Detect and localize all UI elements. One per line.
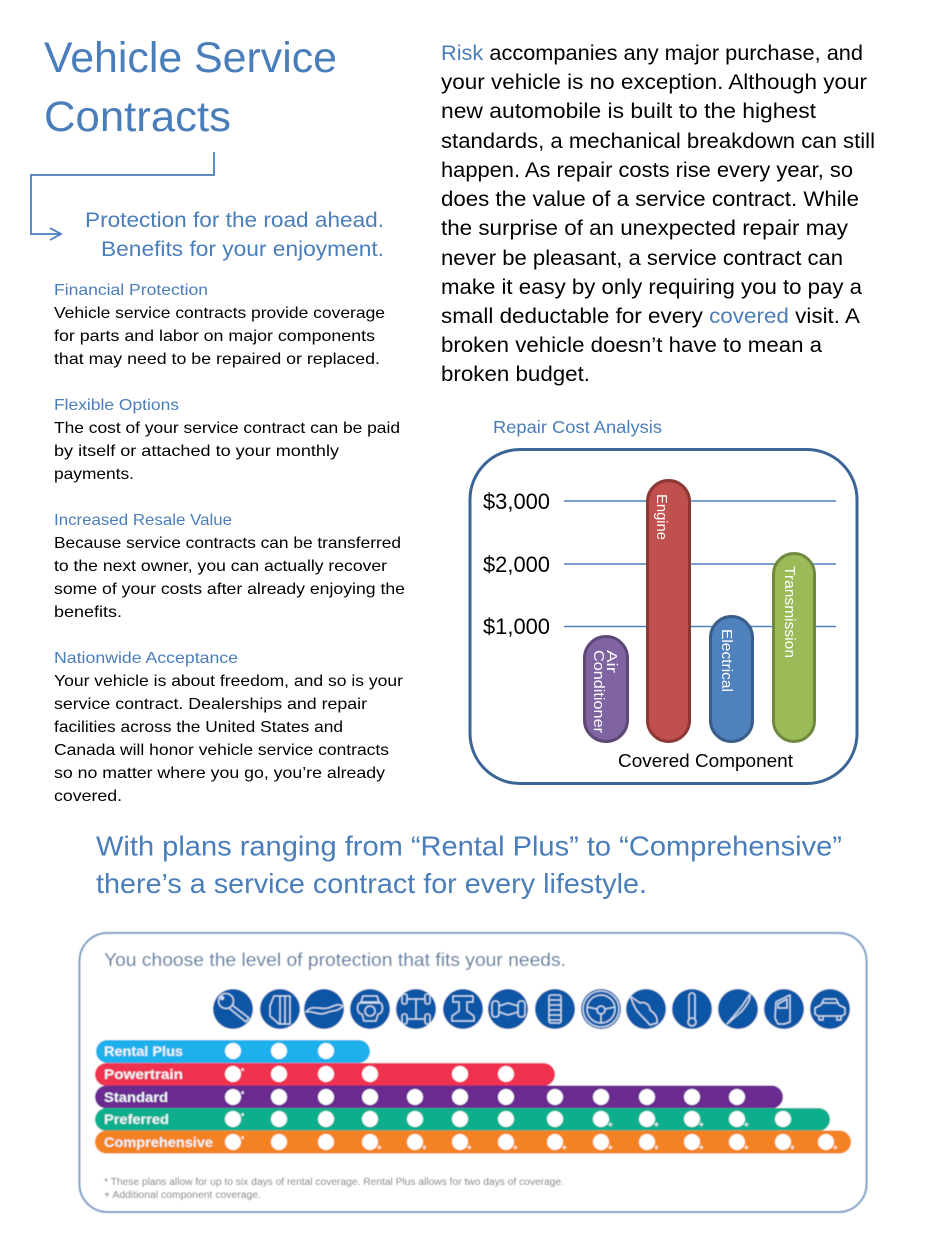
icon: chassis bbox=[402, 994, 430, 1024]
plan row: powertrain: * bbox=[241, 1067, 245, 1076]
text block: nationwide acceptance: facilities across the United States and bbox=[54, 719, 343, 736]
icon: gasket bbox=[630, 996, 657, 1025]
icon: door bbox=[775, 995, 790, 1024]
text block: intro paragraph: broken budget. bbox=[441, 362, 590, 386]
bar: air conditioner: Air bbox=[603, 650, 620, 673]
plan row: standard bbox=[95, 1086, 783, 1108]
text block: increased resale value: to the next owner, you can actually recover bbox=[54, 558, 387, 575]
text block: nationwide acceptance: so no matter where you go, you’re already bbox=[54, 765, 385, 782]
tagline: Benefits for your enjoyment. bbox=[101, 237, 384, 261]
text block: flexible options: payments. bbox=[54, 466, 134, 483]
icon: axle bbox=[492, 1001, 525, 1017]
panel: protection levels bbox=[80, 933, 866, 1212]
bar: transmission: Transmission bbox=[781, 566, 798, 658]
text block: intro paragraph: does the value of a service contract. While bbox=[441, 187, 859, 211]
plan row: comprehensive: Comprehensive bbox=[104, 1134, 213, 1150]
title: Contracts bbox=[44, 93, 231, 141]
text block: intro paragraph: broken vehicle doesn’t have to mean a bbox=[441, 333, 822, 357]
text block: increased resale value: Increased Resale Value bbox=[54, 512, 232, 529]
title bbox=[44, 34, 337, 141]
plan row: powertrain bbox=[95, 1063, 555, 1086]
icon: transmission bbox=[452, 996, 474, 1021]
chart heading: Repair Cost Analysis bbox=[493, 417, 662, 437]
plan row: comprehensive: + bbox=[467, 1143, 472, 1152]
text block: financial protection: Vehicle service contracts provide coverage bbox=[54, 305, 385, 322]
icon: steering wheel bbox=[583, 991, 619, 1027]
text block: flexible options: by itself or attached to your monthly bbox=[54, 443, 339, 460]
footnotes: * These plans allow for up to six days of rental coverage. Rental Plus allows for two days of coverage. bbox=[104, 1177, 564, 1188]
text block: intro paragraph: small deductable for every covered visit. A bbox=[441, 304, 861, 328]
bar: electrical: Electrical bbox=[718, 629, 735, 692]
arrow: title to tagline bbox=[31, 152, 214, 240]
text block: intro paragraph: your vehicle is no exception. Although your bbox=[441, 70, 867, 94]
text block: financial protection: for parts and labor on major components bbox=[54, 328, 375, 345]
plans heading: With plans ranging from “Rental Plus” to “Comprehensive” bbox=[96, 830, 842, 862]
icon: hose bbox=[306, 1005, 343, 1014]
icon: key bbox=[218, 994, 249, 1022]
plan row: powertrain: Powertrain bbox=[104, 1066, 183, 1082]
plan row: comprehensive: + bbox=[513, 1143, 518, 1152]
plan row: preferred: Preferred bbox=[104, 1111, 169, 1127]
text block: intro paragraph: standards, a mechanical breakdown can still bbox=[441, 129, 875, 153]
icon: cooling bbox=[549, 995, 561, 1023]
plan row: preferred: * bbox=[241, 1112, 245, 1121]
axis labels bbox=[483, 489, 550, 639]
text block: increased resale value: Because service contracts can be transferred bbox=[54, 535, 401, 552]
text block: intro paragraph: Risk accompanies any major purchase, and bbox=[441, 41, 863, 65]
plan row: comprehensive: + bbox=[833, 1143, 838, 1152]
plan row: comprehensive: + bbox=[699, 1143, 704, 1152]
text block: nationwide acceptance: Your vehicle is about freedom, and so is your bbox=[54, 673, 403, 690]
footnotes bbox=[104, 1177, 564, 1201]
bar: engine bbox=[648, 480, 690, 742]
plan row: comprehensive: + bbox=[744, 1143, 749, 1152]
text block: flexible options bbox=[54, 397, 400, 483]
text block: nationwide acceptance: Nationwide Acceptance bbox=[54, 650, 238, 667]
text block: financial protection: that may need to be repaired or replaced. bbox=[54, 351, 380, 368]
plan row: rental plus: Rental Plus bbox=[104, 1043, 183, 1059]
text block: increased resale value: some of your costs after already enjoying the bbox=[54, 581, 405, 598]
plan row: comprehensive: + bbox=[790, 1143, 795, 1152]
axis labels: $3,000 bbox=[483, 489, 550, 514]
text block: nationwide acceptance: covered. bbox=[54, 788, 122, 805]
text block: nationwide acceptance: Canada will honor vehicle service contracts bbox=[54, 742, 389, 759]
plan row: comprehensive: + bbox=[562, 1143, 567, 1152]
plan row: rental plus bbox=[96, 1040, 370, 1063]
text block: intro paragraph: new automobile is built to the highest bbox=[441, 99, 816, 123]
text block: intro paragraph bbox=[441, 41, 875, 386]
bar: air conditioner: Conditioner bbox=[590, 650, 607, 733]
text block: increased resale value bbox=[54, 512, 405, 621]
plan row: preferred: + bbox=[744, 1120, 749, 1129]
title: Vehicle Service bbox=[44, 34, 337, 82]
icon: wiper bbox=[727, 994, 750, 1024]
text block: intro paragraph: the surprise of an unexpected repair may bbox=[441, 216, 848, 240]
text block: increased resale value: benefits. bbox=[54, 604, 122, 621]
plan row: comprehensive bbox=[95, 1130, 851, 1154]
plan row: standard: * bbox=[241, 1090, 245, 1099]
axis title: Covered Component bbox=[618, 751, 793, 771]
plan row: comprehensive: + bbox=[377, 1143, 382, 1152]
tagline: Protection for the road ahead. bbox=[85, 208, 384, 232]
plans heading bbox=[96, 830, 842, 899]
plan row: preferred: + bbox=[608, 1120, 613, 1129]
panel: repair cost chart bbox=[470, 450, 857, 784]
text block: nationwide acceptance: service contract. Dealerships and repair bbox=[54, 696, 367, 713]
text block: intro paragraph: make it easy by only requiring you to pay a bbox=[441, 275, 862, 299]
plan row: comprehensive: + bbox=[608, 1143, 613, 1152]
text block: flexible options: The cost of your service contract can be paid bbox=[54, 420, 400, 437]
text block: financial protection bbox=[54, 282, 385, 368]
icons row bbox=[213, 989, 850, 1029]
icon: thermometer bbox=[688, 993, 696, 1026]
bar: engine: Engine bbox=[653, 494, 670, 540]
plan row: preferred bbox=[95, 1108, 830, 1131]
bar: air conditioner bbox=[584, 636, 628, 742]
plan row: standard: Standard bbox=[104, 1089, 168, 1105]
text block: flexible options: Flexible Options bbox=[54, 397, 179, 414]
text block: financial protection: Financial Protection bbox=[54, 282, 208, 299]
bar: transmission bbox=[774, 554, 814, 742]
icon: engine bbox=[358, 996, 382, 1021]
icon: car bbox=[815, 999, 845, 1020]
plan row: comprehensive: + bbox=[654, 1143, 659, 1152]
footnotes: + Additional component coverage. bbox=[104, 1190, 261, 1201]
icon: seat panel bbox=[270, 996, 290, 1024]
plans heading: there’s a service contract for every lifestyle. bbox=[96, 868, 647, 899]
axis labels: $1,000 bbox=[483, 614, 550, 639]
bar: electrical bbox=[710, 616, 752, 742]
text block: nationwide acceptance bbox=[54, 650, 403, 805]
panel heading: You choose the level of protection that fits your needs. bbox=[104, 950, 566, 970]
tagline bbox=[85, 208, 384, 261]
axis labels: $2,000 bbox=[483, 552, 550, 577]
plan row: comprehensive: * bbox=[241, 1135, 245, 1144]
text block: intro paragraph: never be pleasant, a service contract can bbox=[441, 246, 843, 270]
plan row: preferred: + bbox=[654, 1120, 659, 1129]
plan row: comprehensive: + bbox=[422, 1143, 427, 1152]
plan row: preferred: + bbox=[699, 1120, 704, 1129]
text block: intro paragraph: happen. As repair costs rise every year, so bbox=[441, 158, 853, 182]
